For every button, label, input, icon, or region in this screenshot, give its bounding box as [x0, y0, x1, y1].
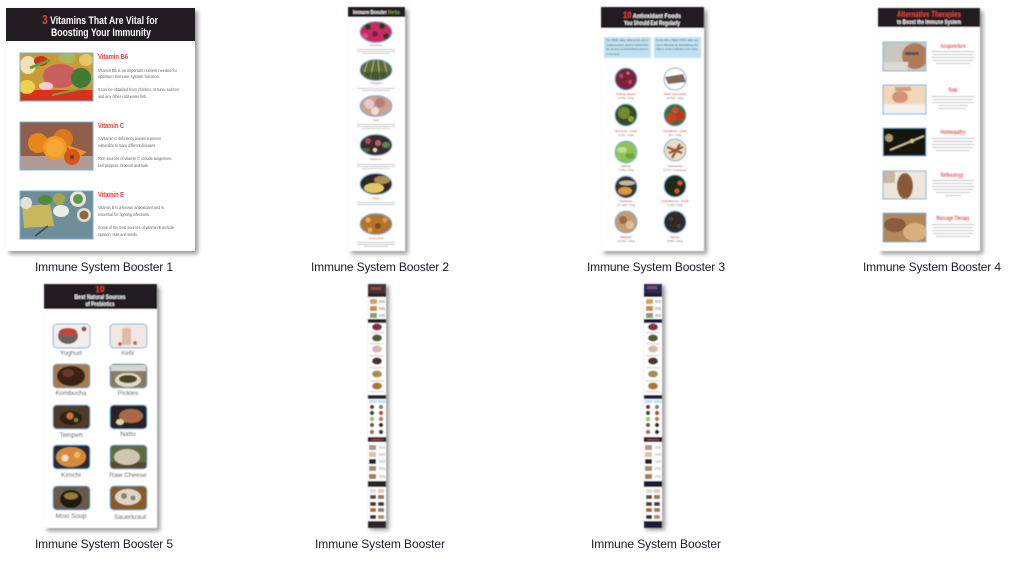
herb: echinacea: Echinacea	[370, 44, 382, 47]
header: 10 probiotics: of Probiotics	[86, 302, 115, 308]
food: kidney beans: Kidney Beans	[616, 92, 636, 96]
therapy: reflexology: Reflexology	[940, 173, 964, 179]
therapy: acupuncture: Acupuncture	[940, 44, 966, 50]
herb: licorice root	[357, 213, 395, 247]
card: Immune System Booster 2	[348, 7, 408, 254]
herb: elderberry	[357, 134, 395, 169]
text: vitamin C: A Vitamin C deficiency leaves a person	[98, 136, 161, 141]
caption: booster 3: Immune System Booster 3	[587, 260, 725, 274]
food: raw cheese	[109, 445, 147, 479]
caption: booster 1: Immune System Booster 1	[35, 260, 173, 274]
food: cinnamon: 5,171 / 1 teaspoon	[663, 168, 687, 172]
text: vitamin B6	[98, 54, 179, 99]
callout: higher ORAC: Foods with a higher ORAC value are	[656, 38, 698, 42]
herb: garlic	[357, 95, 395, 129]
herb: elderberry: Elderberry	[370, 158, 383, 161]
card: combined long infographic, second	[644, 284, 665, 530]
caption: booster 2: Immune System Booster 2	[311, 260, 449, 274]
food: sauerkraut: Sauerkraut	[114, 514, 146, 521]
text: vitamin C: vulnerable to many different diseases.	[98, 143, 156, 148]
card: combined long infographic, first	[368, 284, 389, 530]
food: barley	[615, 141, 637, 172]
food: walnuts: 13,541 / 100g	[617, 239, 635, 243]
therapy: homeopathy	[883, 128, 974, 156]
food: broccoli	[615, 104, 637, 137]
therapy: acupuncture	[883, 42, 974, 71]
therapy: homeopathy: Homeopathy	[940, 130, 966, 136]
header: 3 vitamins: Boosting Your Immunity	[51, 27, 152, 39]
food: kefir	[110, 324, 147, 357]
callout: higher ORAC: more effective at neutralizing the	[656, 43, 698, 47]
callout: ORAC value: The ORAC value refers to the unit of	[606, 38, 648, 42]
food: goji berries: Goji Berries - (raw)	[662, 199, 688, 203]
food: cinnamon	[663, 139, 687, 172]
food: broccoli: 3,101 / 100g	[618, 133, 634, 137]
food: walnuts: Walnuts	[620, 235, 632, 239]
header: 3 vitamins: 3 Vitamins That Are Vital for	[42, 12, 159, 27]
callout: ORAC value	[604, 37, 651, 58]
food: miso soup	[53, 486, 90, 520]
food: goji berries: 3,290 / 100g	[667, 203, 683, 207]
caption: booster 4: Immune System Booster 4	[863, 260, 1001, 274]
food: kidney beans: 8,459 / 100g	[618, 96, 634, 100]
food: spices	[664, 211, 686, 243]
card: Immune System Booster 3	[601, 7, 707, 254]
text: vitamin E: spinach, nuts and seeds.	[98, 232, 138, 237]
card: Immune System Booster 5	[44, 284, 160, 531]
caption: booster 5: Immune System Booster 5	[35, 537, 173, 551]
food: tomatoes	[663, 104, 687, 137]
food: kombucha	[53, 364, 90, 397]
food: kombucha: Kombucha	[55, 390, 87, 397]
header: 10 probiotics: 10	[96, 285, 105, 294]
header: alternative therapies: to Boost the Immune System	[897, 20, 961, 26]
food: barley: Barley	[621, 164, 631, 168]
header: alternative therapies	[878, 8, 980, 27]
callout: ORAC value: measurement used to determine	[606, 43, 648, 47]
text: vitamin B6: Vitamin B6 is an important nutrient needed for	[98, 68, 177, 73]
herb: ginger	[357, 173, 395, 205]
text: vitamin C: bell peppers, broccoli and kale.	[98, 163, 149, 168]
food: dark chocolate: Dark Chocolate	[664, 92, 686, 96]
header: 10 antioxidant foods: You Should Eat Regularly	[624, 21, 681, 27]
food: dark chocolate	[664, 68, 686, 100]
text: vitamin E: Vitamin E	[98, 192, 124, 199]
food: miso soup: Miso Soup	[56, 513, 87, 520]
card: Immune System Booster 4	[878, 8, 983, 254]
food: spices: 8,983 / 100g	[667, 239, 683, 243]
card: Immune System Booster 1	[6, 8, 198, 254]
callout: ORAC value: the amount of antioxidants present	[606, 47, 648, 51]
food: kidney beans	[615, 68, 637, 100]
herb: astragalus: Astragalus	[370, 82, 383, 85]
food: kefir: Kefir	[121, 350, 136, 357]
text: vitamin E	[98, 192, 174, 237]
food: pickles	[110, 364, 147, 397]
callout: higher ORAC: effects of free radicals in the body.	[656, 47, 698, 51]
text: vitamin B6: optimum immune system function.	[98, 74, 160, 79]
text: vitamin B6: and any other cold water fish.	[98, 94, 147, 99]
header: 3 vitamins	[6, 8, 195, 41]
food: raw cheese: Raw Cheese	[109, 472, 147, 479]
header: 10 probiotics	[44, 284, 157, 309]
header: 10 probiotics: Best Natural Sources	[74, 295, 126, 301]
herb: ginger: Ginger	[372, 197, 380, 200]
text: vitamin C: Vitamin C	[98, 123, 124, 130]
food: natto	[110, 405, 147, 438]
food: cinnamon: Cinnamon	[668, 164, 682, 168]
header: immune booster herbs	[348, 7, 405, 17]
food: pickles: Pickles	[118, 390, 139, 397]
food: turmeric: Turmeric	[620, 199, 633, 203]
food: natto: Natto	[120, 431, 136, 438]
therapy: reflexology	[883, 171, 974, 199]
text: vitamin C: Rich sources of vitamin C include tangerines,	[98, 156, 172, 161]
therapy: reiki	[883, 85, 974, 114]
food: tomatoes: Tomatoes - (raw)	[663, 129, 687, 133]
food: dark chocolate: 20,816 / 100g	[666, 96, 684, 100]
therapy: massage therapy: Massage Therapy	[936, 216, 970, 222]
food: tempeh	[53, 405, 90, 439]
food: turmeric: 127,068 / 100g	[617, 203, 636, 207]
food: kimchi: Kimchi	[61, 472, 81, 479]
photo: vitamin B6 foods	[19, 53, 93, 101]
header: 10 antioxidant foods	[601, 7, 704, 28]
callout: higher ORAC	[654, 37, 701, 58]
food: spices: Spices	[670, 235, 680, 239]
herb: garlic: Garlic	[373, 119, 380, 122]
text: vitamin B6: Vitamin B6	[98, 54, 128, 61]
food: yoghurt: Yoghurt	[60, 350, 82, 357]
food: tomatoes: 367 / 100g	[668, 133, 682, 137]
herb: echinacea	[357, 21, 395, 54]
callout: ORAC value: in the food.	[606, 52, 620, 56]
photo: vitamin E foods	[20, 191, 93, 239]
header: immune booster herbs: Immune Booster Herbs	[353, 10, 400, 16]
text: vitamin E: essential for fighting infections.	[98, 212, 150, 217]
herb: licorice root: Licorice Root	[369, 237, 384, 240]
caption: combined, first: Immune System Booster	[315, 537, 445, 551]
therapy: reiki: Reiki	[948, 88, 958, 94]
food: barley: 7,300 / 100g	[618, 168, 634, 172]
food: turmeric	[615, 176, 637, 207]
food: broccoli: Broccoli - (raw)	[615, 129, 637, 133]
food: goji berries	[662, 175, 688, 207]
caption: combined, second: Immune System Booster	[591, 537, 721, 551]
food: tempeh: Tempeh	[59, 432, 83, 439]
food: walnuts	[615, 211, 637, 243]
text: vitamin B6: It can be obtained from chicken, or tuna, salmon	[98, 87, 179, 92]
header: 10 antioxidant foods: 10 Antioxidant Foods	[623, 10, 681, 20]
photo: vitamin C oranges	[20, 122, 93, 170]
food: sauerkraut	[110, 486, 147, 521]
header: alternative therapies: Alternative Therapies	[897, 10, 961, 19]
text: vitamin E: Vitamin E is a known antioxidant and is	[98, 205, 165, 210]
food: kimchi	[53, 445, 90, 479]
text: vitamin E: Some of the best sources of vitamin E include	[98, 225, 174, 230]
therapy: massage therapy	[883, 213, 974, 242]
text: vitamin C	[98, 123, 172, 168]
herb: astragalus	[357, 59, 395, 91]
food: yoghurt	[53, 324, 90, 357]
